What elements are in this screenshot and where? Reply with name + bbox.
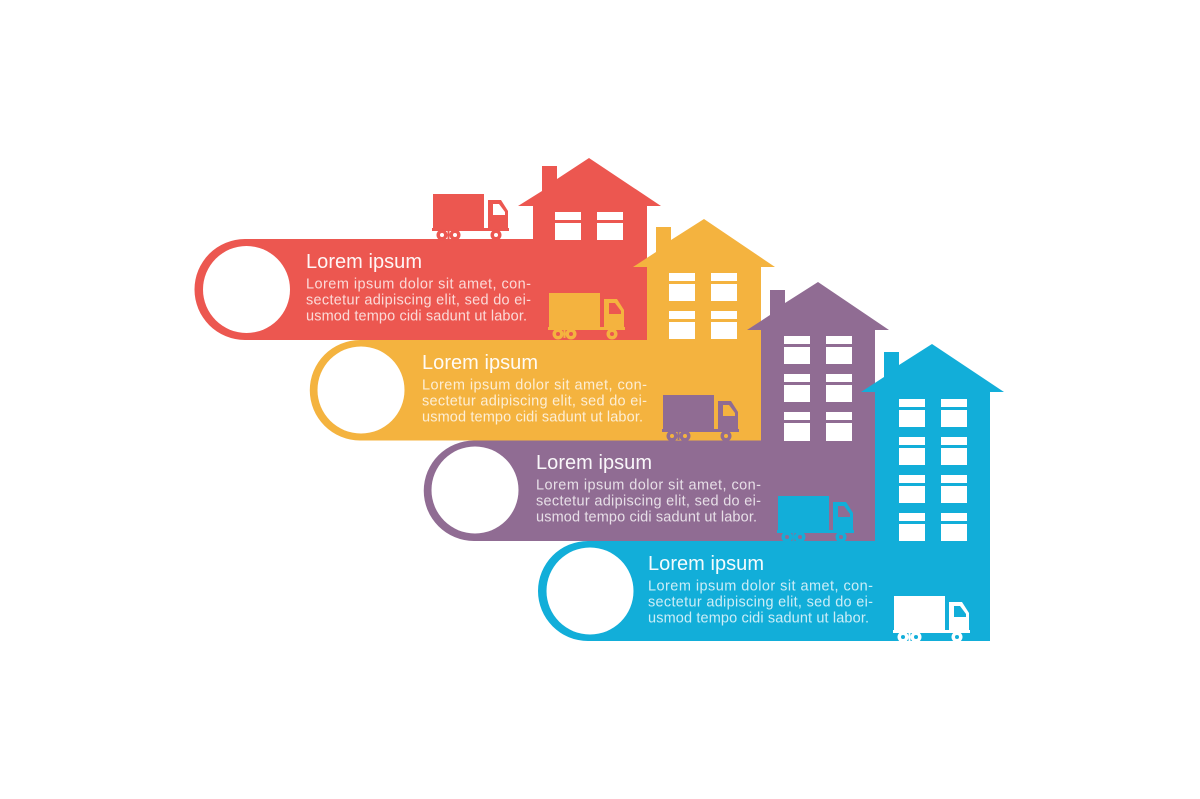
icon: white truck <box>893 596 970 642</box>
blue body text <box>648 578 873 626</box>
red body text: usmod tempo cidi sadunt ut labor. <box>306 308 527 324</box>
purple body text: usmod tempo cidi sadunt ut labor. <box>536 510 757 526</box>
purple body text: Lorem ipsum dolor sit amet, con- <box>536 478 761 494</box>
yellow image circle <box>318 346 404 434</box>
icon: blue truck <box>777 496 854 542</box>
purple house windows <box>784 336 852 441</box>
panel: blue step <box>538 344 1004 642</box>
red band and house <box>194 158 661 340</box>
blue house windows <box>899 399 967 541</box>
purple body text: sectetur adipiscing elit, sed do ei- <box>536 494 761 510</box>
red body text: Lorem ipsum dolor sit amet, con- <box>306 276 531 292</box>
blue body text: Lorem ipsum dolor sit amet, con- <box>648 578 873 594</box>
blue heading: Lorem ipsum <box>648 553 764 575</box>
yellow body text: sectetur adipiscing elit, sed do ei- <box>422 394 647 410</box>
purple image circle <box>432 446 518 534</box>
icon: red truck <box>432 194 509 240</box>
red house windows <box>555 212 623 240</box>
blue body text: usmod tempo cidi sadunt ut labor. <box>648 610 869 626</box>
yellow body text <box>422 378 647 426</box>
yellow band and house <box>310 219 775 440</box>
purple heading: Lorem ipsum <box>536 452 652 474</box>
panel: purple step <box>424 282 889 541</box>
red body text <box>306 276 531 324</box>
panel: red step <box>194 158 661 340</box>
panel: yellow step <box>310 219 775 440</box>
yellow body text: Lorem ipsum dolor sit amet, con- <box>422 378 647 394</box>
purple band and house <box>424 282 889 541</box>
blue body text: sectetur adipiscing elit, sed do ei- <box>648 594 873 610</box>
red body text: sectetur adipiscing elit, sed do ei- <box>306 292 531 308</box>
red heading: Lorem ipsum <box>306 251 422 273</box>
icon: yellow truck <box>548 293 625 340</box>
purple body text <box>536 478 761 526</box>
yellow body text: usmod tempo cidi sadunt ut labor. <box>422 410 643 426</box>
blue band and house <box>538 344 1004 641</box>
icon: purple truck <box>662 395 739 442</box>
blue image circle <box>546 548 634 634</box>
red image circle <box>203 246 290 333</box>
yellow heading: Lorem ipsum <box>422 352 538 374</box>
yellow house windows <box>669 273 737 339</box>
